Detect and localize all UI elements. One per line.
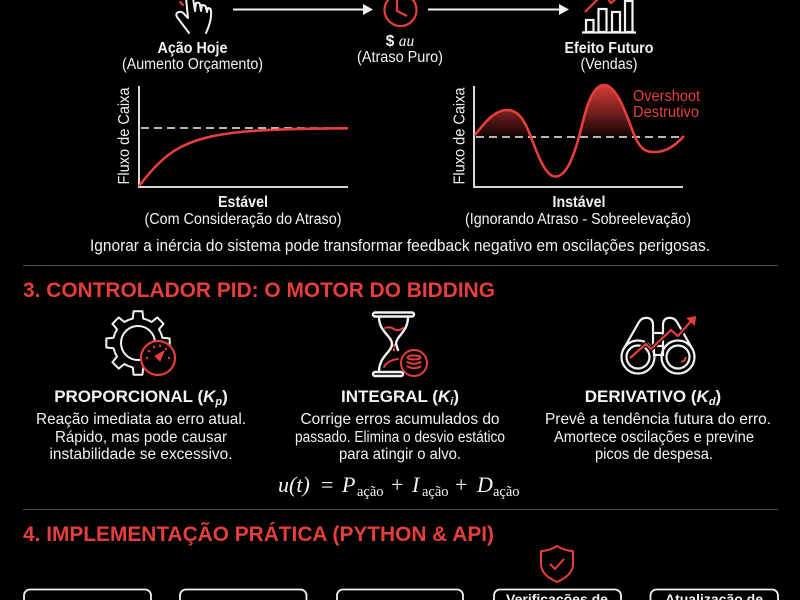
column: derivativo: picos de despesa. xyxy=(595,446,713,463)
label: pure delay xyxy=(357,33,443,66)
text: inertia warning: Ignorar a inércia do sistema pode transformar feedback negativo em oscilações perigosas. xyxy=(90,237,710,255)
label: future effect: Efeito Futuro xyxy=(564,40,654,57)
chart: unstable response: Fluxo de Caixa xyxy=(452,87,468,184)
formula: PID control law: P xyxy=(341,472,355,497)
formula: PID control law: + xyxy=(455,472,467,497)
label: action today: (Aumento Orçamento) xyxy=(122,56,263,73)
formula: PID control law: ação xyxy=(357,484,384,500)
icon: hand pressing xyxy=(176,0,211,33)
column: integral: passado. Elimina o desvio estático xyxy=(295,429,505,446)
formula: PID control law: + xyxy=(391,472,403,497)
column: derivativo: Amortece oscilações e previne xyxy=(554,429,754,446)
icon: gear with gauge xyxy=(106,311,175,375)
column: proporcional: p xyxy=(214,396,222,408)
chart: unstable response: Instável xyxy=(552,194,606,211)
column: derivativo: Prevê a tendência futura do erro. xyxy=(545,411,771,428)
icon: clock xyxy=(384,0,416,26)
column: proporcional: PROPORCIONAL (K xyxy=(54,387,215,406)
column: derivativo: ) xyxy=(716,387,721,406)
step box 4 xyxy=(494,590,621,600)
icon: binoculars with trend arrow xyxy=(622,316,696,374)
column: integral: para atingir o alvo. xyxy=(339,446,461,463)
chart: unstable response: (Ignorando Atraso - Sobreelevação) xyxy=(465,211,691,228)
formula: PID control law: u(t) xyxy=(278,472,310,497)
arrow: action to delay xyxy=(233,4,373,15)
icon: rising bars xyxy=(582,0,636,32)
formula: PID control law: = xyxy=(321,472,333,497)
column: integral: INTEGRAL (K xyxy=(341,387,450,406)
chart: stable response: Fluxo de Caixa xyxy=(116,87,133,184)
step box 2 xyxy=(180,590,306,600)
column: integral: Corrige erros acumulados do xyxy=(300,411,500,428)
chart: stable response: (Com Consideração do Atraso) xyxy=(144,211,342,228)
formula: PID control law xyxy=(278,472,520,500)
label: future effect xyxy=(564,40,654,73)
arrow: delay to effect xyxy=(428,4,569,15)
column: proporcional: ) xyxy=(222,387,228,406)
column: derivativo: DERIVATIVO (K xyxy=(585,387,709,406)
formula: PID control law: ação xyxy=(422,484,449,500)
label: action today xyxy=(122,40,263,73)
icon: hourglass with coins xyxy=(373,312,427,376)
step box 3 xyxy=(337,590,463,600)
column: integral: ) xyxy=(453,387,459,406)
label: future effect: (Vendas) xyxy=(580,56,638,73)
label: destructive overshoot xyxy=(633,88,701,121)
column: integral: i xyxy=(450,396,454,408)
label: destructive overshoot: Overshoot xyxy=(633,88,701,105)
label: pure delay: (Atraso Puro) xyxy=(357,49,443,66)
chart: stable response: Estável xyxy=(218,194,268,211)
icon: shield check xyxy=(541,546,573,582)
label: pure delay: $ au xyxy=(386,33,414,50)
column: proporcional: instabilidade se excessivo. xyxy=(50,446,232,463)
step box 5 xyxy=(650,590,778,600)
column: derivativo: d xyxy=(709,396,716,408)
label: action today: Ação Hoje xyxy=(158,40,228,57)
column: proporcional: Reação imediata ao erro atual. xyxy=(36,411,246,428)
chart: stable response xyxy=(116,86,348,228)
column: proporcional: Rápido, mas pode causar xyxy=(55,429,228,446)
column: derivativo xyxy=(545,387,771,463)
heading: section 3: 3. CONTROLADOR PID: O MOTOR DO BIDDING xyxy=(23,279,495,302)
chart: unstable response xyxy=(452,85,701,228)
step box 1 xyxy=(24,590,151,600)
label: destructive overshoot: Destrutivo xyxy=(633,104,699,121)
heading: section 4: 4. IMPLEMENTAÇÃO PRÁTICA (PYTHON & API) xyxy=(23,523,494,546)
formula: PID control law: D xyxy=(476,472,493,497)
formula: PID control law: ação xyxy=(493,484,520,500)
formula: PID control law: I xyxy=(411,472,421,497)
column: integral xyxy=(295,387,505,463)
column: proporcional xyxy=(36,387,246,463)
